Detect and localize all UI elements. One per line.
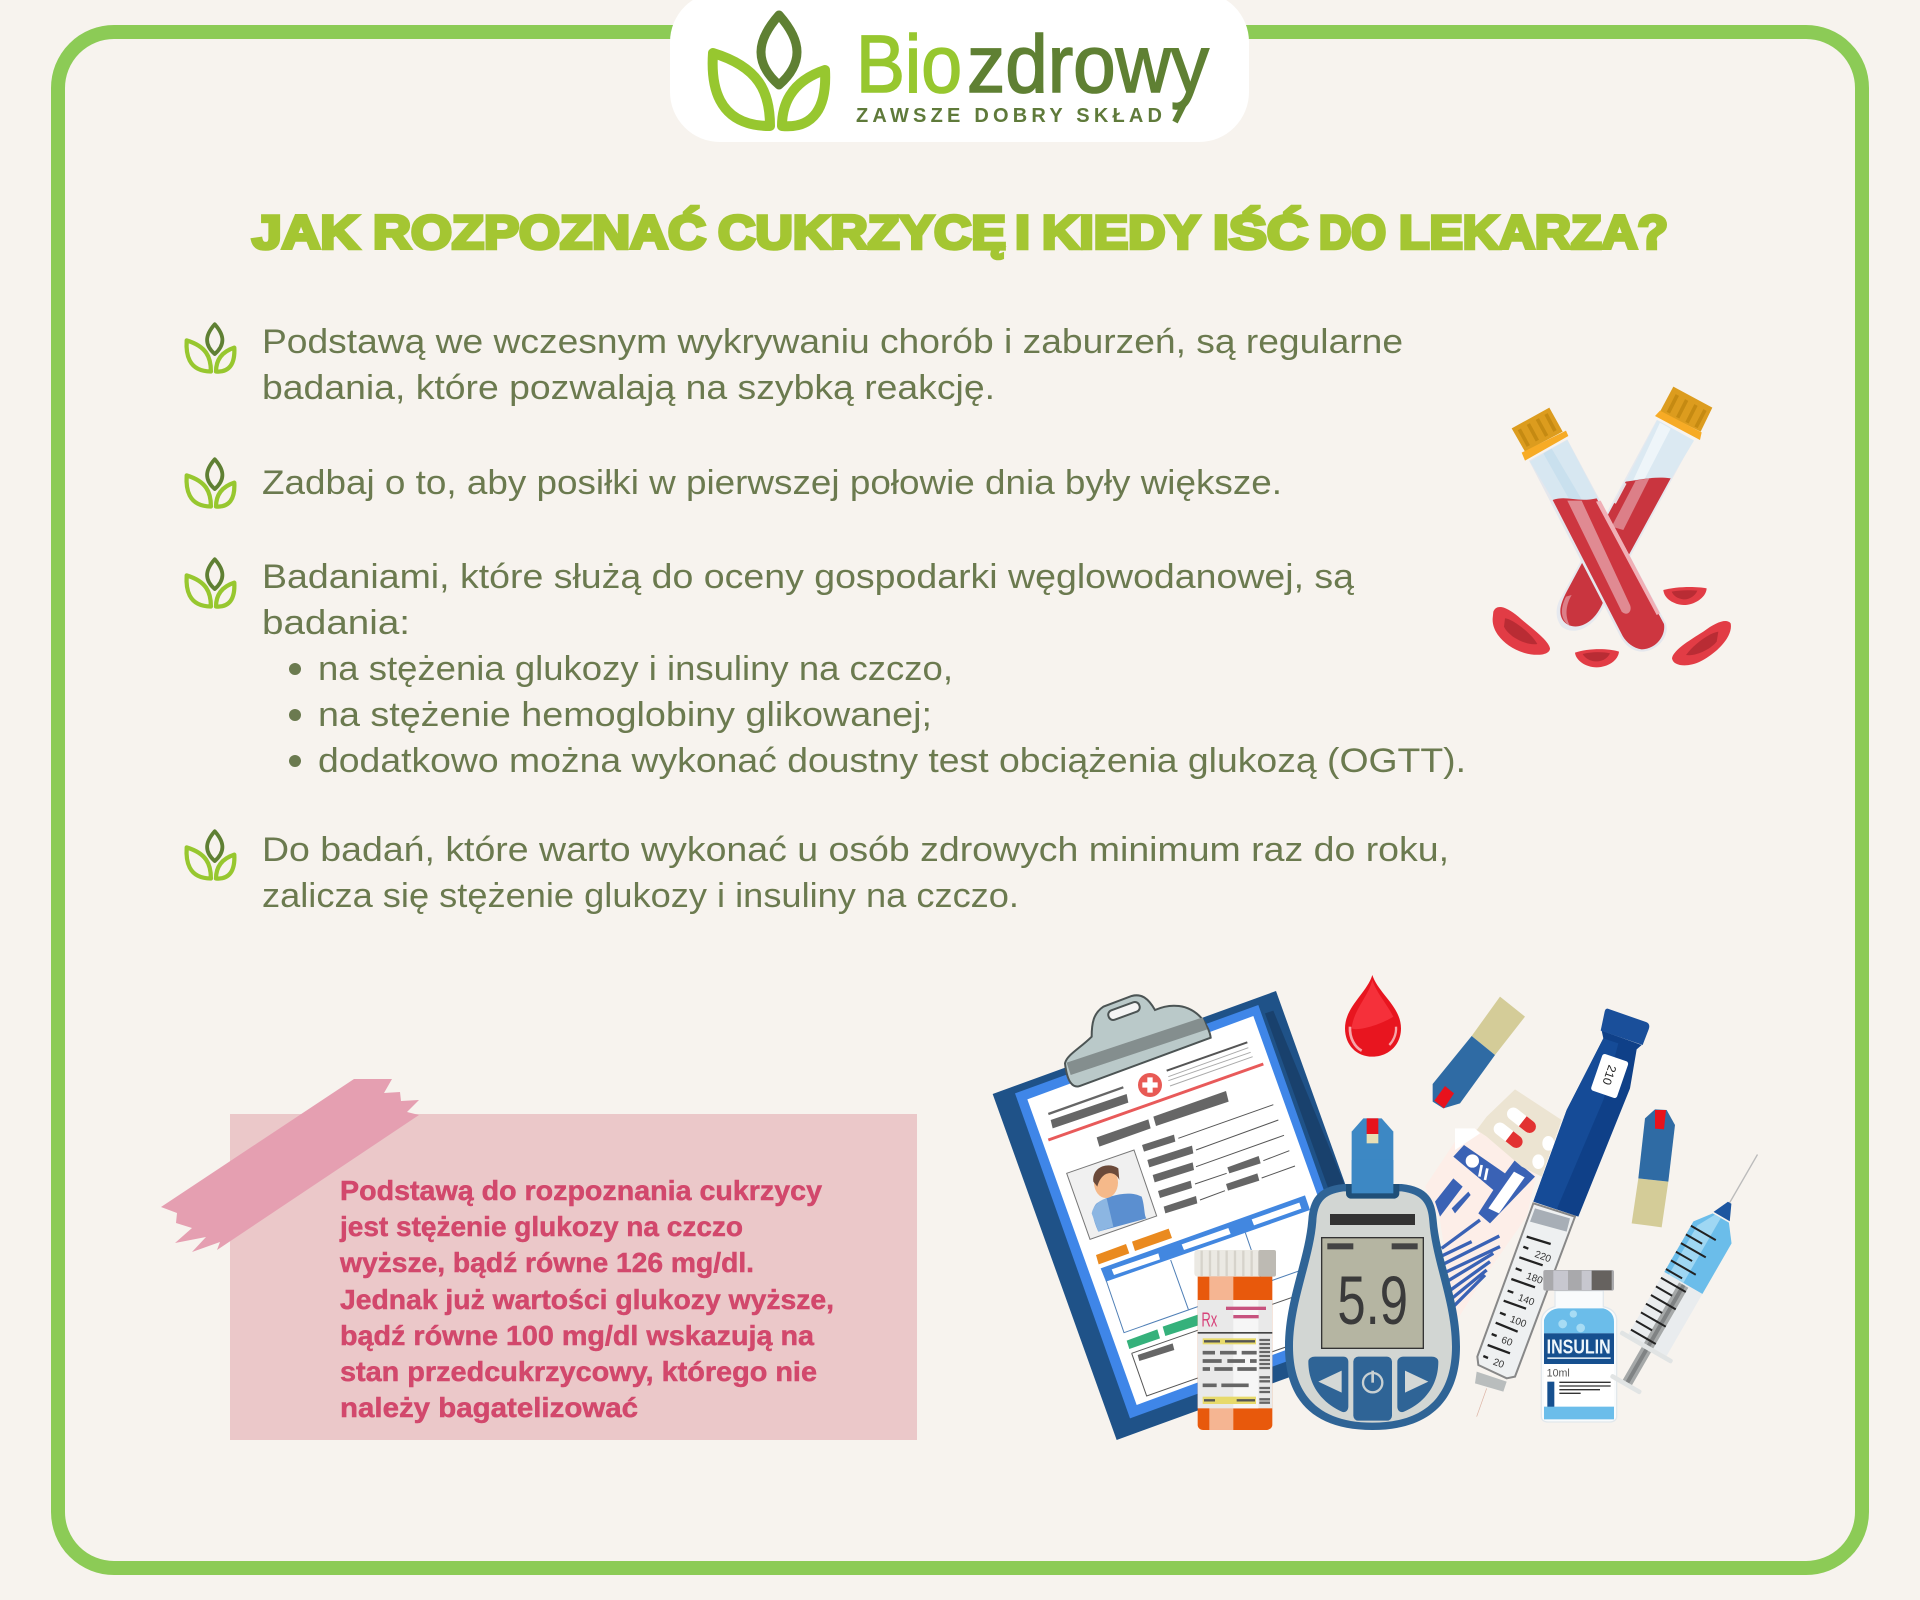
logo wordmark: Bio: [856, 19, 962, 110]
pen scale numbers: 140: [1516, 1292, 1536, 1309]
title: IŚĆ: [1213, 204, 1308, 260]
callout text: Jednak już wartości glukozy wyższe,: [340, 1284, 834, 1315]
title: CUKRZYCĘ: [718, 206, 1006, 260]
callout text: stan przedcukrzycowy, którego nie: [340, 1356, 817, 1387]
bullet group 4: [187, 831, 1449, 915]
title: KIEDY: [1042, 206, 1200, 260]
bullet group 1: [187, 323, 1403, 407]
bullet group 3: na stężenie hemoglobiny glikowanej;: [318, 696, 932, 734]
Rx label: Rx: [1201, 1309, 1218, 1332]
bullet group 1: Podstawą we wczesnym wykrywaniu chorób i zaburzeń, są regularne: [262, 323, 1403, 361]
blue table: [1101, 1195, 1330, 1333]
red blood cells: [1493, 587, 1731, 667]
logo wordmark: zdrowy: [967, 19, 1209, 110]
icon: clipboard with patient chart: [993, 991, 1400, 1440]
icon: syringe: [1598, 1139, 1783, 1401]
pen scale numbers: 180: [1525, 1271, 1544, 1287]
icon: glucose meter: [1285, 1118, 1460, 1430]
back tube: [1557, 420, 1694, 631]
orange cap right: [1655, 387, 1712, 440]
icon: test strip upper: [1433, 997, 1525, 1108]
title: LEKARZA?: [1399, 206, 1668, 260]
icon: leaf bullet: [187, 324, 234, 372]
patient fields: [1142, 1135, 1261, 1213]
orange tags: [1096, 1229, 1172, 1264]
bullet group 4: zalicza się stężenie glukozy i insuliny na czczo.: [262, 877, 1019, 915]
callout text: Podstawą do rozpoznania cukrzycy: [340, 1175, 823, 1206]
bullet group 4: Do badań, które warto wykonać u osób zdrowych minimum raz do roku,: [262, 831, 1449, 869]
left items: [993, 991, 1460, 1440]
logo: Biozdrowy: [670, 0, 1249, 142]
bullet group 3: badania:: [262, 604, 410, 642]
icon: blood test tubes: [1493, 387, 1731, 667]
callout text: [339, 1175, 834, 1423]
orange cap left: [1512, 408, 1568, 461]
callout text: należy bagatelizować: [340, 1392, 638, 1423]
icon: insulin pen: [1475, 1009, 1649, 1417]
pink tape: [161, 1079, 419, 1252]
icon: pill blister: [1477, 1089, 1562, 1177]
patient photo: [1067, 1150, 1157, 1239]
bullet group 3: Badaniami, które służą do oceny gospodarki węglowodanowej, są: [262, 558, 1355, 596]
bullet group 3: na stężenia glukozy i insuliny na czczo,: [318, 650, 953, 688]
vial label: INSULIN: [1547, 1336, 1611, 1358]
icon: medicine box: [1425, 1128, 1537, 1323]
pen scale numbers: [1491, 1249, 1553, 1371]
pen dose window: 210: [1599, 1063, 1619, 1087]
callout text: bądź równe 100 mg/dl wskazują na: [340, 1320, 815, 1351]
pen scale numbers: 60: [1500, 1335, 1514, 1349]
green tags: [1127, 1312, 1210, 1349]
vial volume: 10ml: [1547, 1368, 1570, 1380]
front tube: [1529, 439, 1667, 652]
metal clip: [1065, 995, 1211, 1087]
right-side items: [1345, 975, 1783, 1422]
title: [252, 204, 1668, 260]
bullet group 2: Zadbaj o to, aby posiłki w pierwszej połowie dnia były większe.: [262, 464, 1282, 502]
pen scale numbers: 100: [1508, 1314, 1528, 1330]
logo tagline: ZAWSZE DOBRY SKŁAD: [856, 105, 1162, 127]
bullet group 1: badania, które pozwalają na szybką reakcję.: [262, 369, 995, 407]
logo wordmark: [856, 19, 1209, 122]
title: ROZPOZNAĆ: [373, 204, 706, 260]
title: JAK: [252, 206, 359, 260]
icon: leaf bullet: [187, 459, 234, 507]
meter buttons: [1308, 1357, 1438, 1421]
icon: Rx pill bottle: [1194, 1250, 1276, 1430]
icon: insulin vial: [1541, 1270, 1617, 1422]
callout text: wyższe, bądź równe 126 mg/dl.: [339, 1247, 754, 1278]
icon: blood drop: [1345, 975, 1401, 1057]
pen scale numbers: 220: [1533, 1249, 1553, 1265]
chart header: [1048, 1042, 1263, 1147]
logo icon: leaves: [713, 15, 825, 126]
bullet group 3: [187, 558, 1466, 780]
icon: test strip right: [1632, 1109, 1675, 1227]
icon: leaf bullet: [187, 831, 234, 879]
medical illustration: [993, 975, 1783, 1440]
icon: leaf bullet: [187, 559, 234, 607]
meter reading: 5.9: [1337, 1263, 1408, 1339]
callout: diagnosis note: [161, 1079, 917, 1440]
bullet group 3: dodatkowo można wykonać doustny test obciążenia glukozą (OGTT).: [318, 742, 1466, 780]
title: I: [1015, 206, 1030, 260]
title: DO: [1319, 206, 1386, 260]
callout text: jest stężenie glukozy na czczo: [339, 1211, 743, 1242]
pen scale numbers: 20: [1491, 1357, 1506, 1371]
